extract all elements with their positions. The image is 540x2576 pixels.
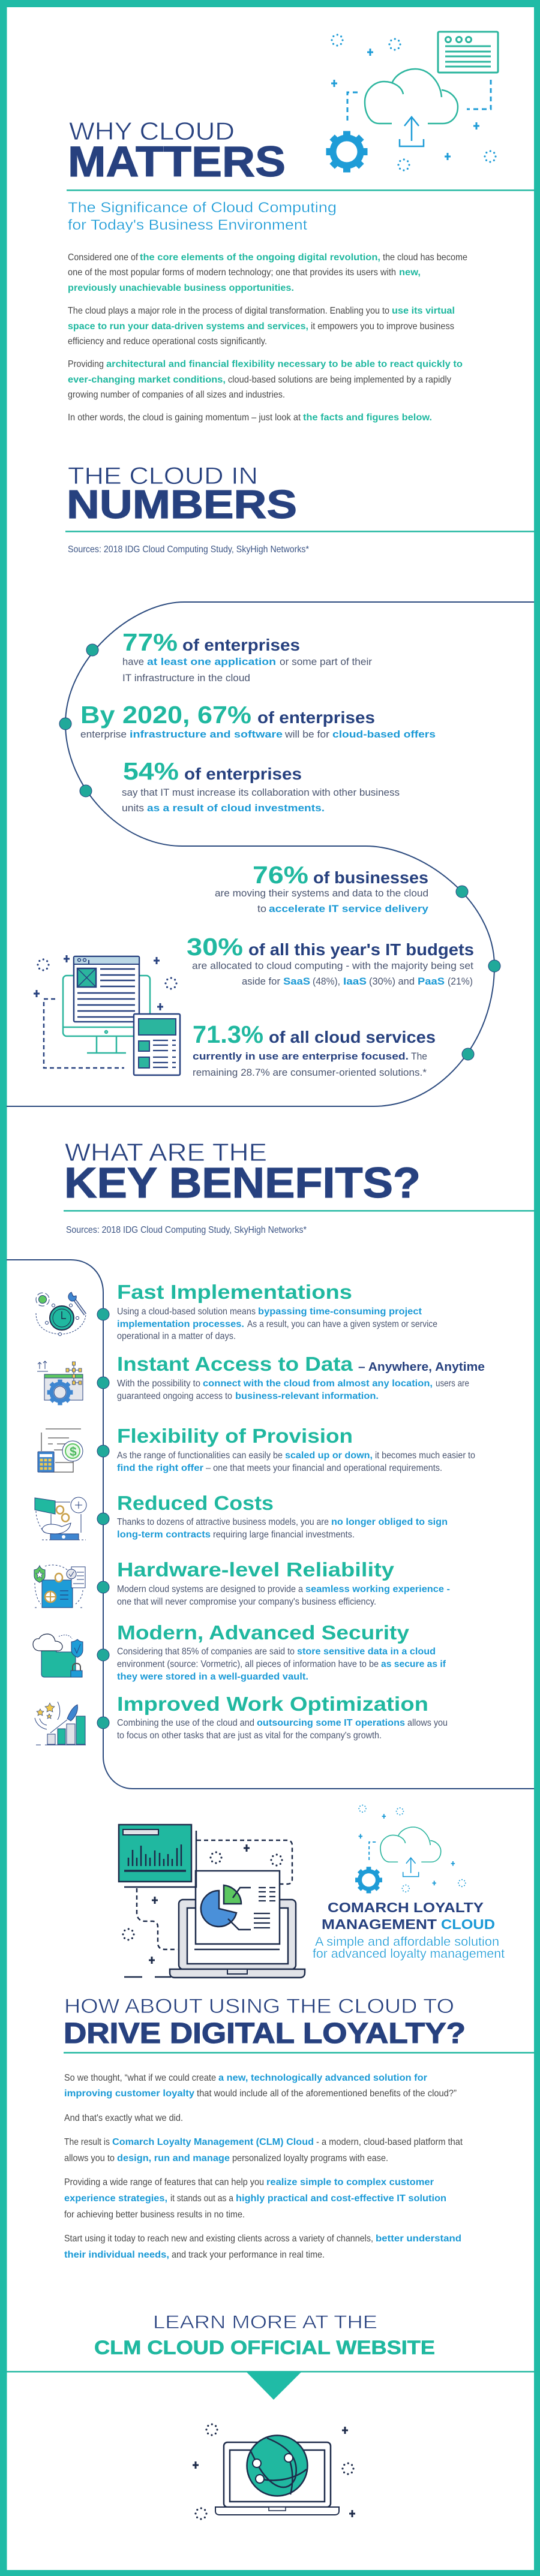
stat: 71.3%: [193, 1021, 436, 1078]
loyalty text: design, run and manage: [117, 2153, 230, 2163]
intro text: growing number of companies of all sizes and industries.: [68, 390, 285, 400]
stat: 30%: (21%): [448, 976, 473, 987]
divider with arrow: [7, 2371, 534, 2400]
icon: laptop report illustration: [119, 1825, 305, 1978]
call to action: CLM CLOUD OFFICIAL WEBSITE: [94, 2337, 435, 2358]
benefit: flexibility of provision: scaled up or down,: [285, 1450, 373, 1461]
loyalty text: Comarch Loyalty Management (CLM) Cloud: [112, 2137, 314, 2147]
benefit: instant access to data: connect with the cloud from almost any location,: [203, 1379, 433, 1389]
benefit: improved work optimization: [117, 1693, 448, 1741]
loyalty text: realize simple to complex customer: [266, 2177, 434, 2187]
benefit: instant access to data: business-relevant information.: [235, 1391, 379, 1401]
benefit: improved work optimization: to focus on other tasks that are just as vital for the company's growth.: [117, 1731, 382, 1741]
stat: 77%: IT infrastructure in the cloud: [122, 672, 250, 684]
intro text: use its virtual: [392, 306, 455, 316]
decorative marks: [193, 2424, 355, 2519]
benefit: modern advanced security: Modern, Advanced Security: [117, 1622, 409, 1644]
loyalty text: Providing a wide range of features that can help you: [64, 2177, 264, 2187]
intro text: one of the most popular forms of modern technology; one that provides its users with: [68, 267, 396, 278]
title: why cloud matters: [68, 117, 286, 186]
icon: safe and shield: [34, 1565, 85, 1608]
loyalty text: highly practical and cost-effective IT solution: [236, 2193, 446, 2204]
decorative marks: [34, 955, 176, 1010]
stat: 30%: SaaS: [283, 976, 310, 987]
stat: 30%: PaaS: [418, 976, 445, 987]
heading: the cloud in numbers: NUMBERS: [67, 482, 297, 527]
benefit: instant access to data: guaranteed ongoing access to: [117, 1391, 232, 1401]
benefit: fast implementations: [117, 1281, 437, 1341]
heading: key benefits: KEY BENEFITS?: [64, 1160, 421, 1207]
benefit: instant access to data: – Anywhere, Anytime: [358, 1361, 485, 1374]
intro text: the cloud has become: [383, 252, 467, 263]
loyalty text: for achieving better business results in no time.: [64, 2210, 245, 2220]
heading: drive digital loyalty: HOW ABOUT USING THE CLOUD TO: [64, 1995, 454, 2018]
benefit: hardware-level reliability: [117, 1559, 450, 1607]
heading: key benefits: WHAT ARE THE: [65, 1138, 267, 1166]
stat: by 2020 67%: will be for: [284, 729, 329, 740]
icon: invoice, calculator and coin: [38, 1429, 83, 1472]
stat: 77%: of enterprises: [182, 636, 300, 654]
stat: 71.3%: of all cloud services: [269, 1028, 436, 1046]
benefit: flexibility of provision: [117, 1425, 475, 1473]
logo: comarch loyalty management cloud: [313, 1805, 505, 1961]
loyalty text: Start using it today to reach new and existing clients across a variety of channels,: [64, 2234, 373, 2244]
benefit: flexibility of provision: it becomes much easier to: [375, 1450, 475, 1461]
loyalty text: that would include all of the aforementioned benefits of the cloud?”: [197, 2089, 457, 2099]
benefit: instant access to data: With the possibility to: [117, 1379, 200, 1389]
call to action: [94, 2311, 435, 2358]
icon: cloud folder and lock: [33, 1634, 83, 1677]
benefit: flexibility of provision: – one that meets your financial and operational requirements.: [206, 1463, 442, 1473]
heading: key benefits: [64, 1138, 421, 1207]
intro text: the core elements of the ongoing digital revolution,: [140, 252, 380, 263]
intro text: Providing: [68, 359, 104, 369]
subtitle: [68, 200, 337, 233]
stat: 71.3%: currently in use are enterprise focused.: [193, 1051, 409, 1062]
dashed connectors: [347, 80, 491, 121]
benefit: modern advanced security: they were stored in a well-guarded vault.: [117, 1672, 308, 1682]
timeline: benefits: [7, 1260, 534, 1789]
stat: by 2020 67%: of enterprises: [257, 708, 375, 727]
benefit: fast implementations: implementation processes.: [117, 1319, 244, 1329]
heading: the cloud in numbers: THE CLOUD IN: [68, 463, 258, 489]
stat: 54%: [122, 757, 400, 814]
window: [74, 956, 139, 1022]
stat: 77%: at least one application: [147, 656, 276, 667]
benefit: hardware-level reliability: Modern cloud systems are designed to provide a: [117, 1584, 303, 1594]
benefit: modern advanced security: environment (source: Vormetric), all pieces of information have to be: [117, 1659, 379, 1669]
stat: 54%: say that IT must increase its collaboration with other business: [122, 787, 400, 798]
icon: monitor, window and tablet: [34, 955, 180, 1075]
icon: cloud hero illustration: [326, 32, 498, 173]
subtitle: for Today's Business Environment: [68, 217, 307, 233]
decorative marks: [123, 1844, 282, 1964]
benefit: reduced costs: Thanks to dozens of attractive business models, you are: [117, 1517, 329, 1527]
benefit: modern advanced security: Considering that 85% of companies are said to: [117, 1647, 295, 1657]
benefit: reduced costs: long-term contracts: [117, 1530, 211, 1540]
benefit: reduced costs: no longer obliged to sign: [331, 1517, 448, 1527]
loyalty text: their individual needs,: [64, 2250, 169, 2260]
benefit: improved work optimization: Combining the use of the cloud and: [117, 1718, 254, 1728]
stat: by 2020 67%: infrastructure and software: [130, 729, 283, 740]
benefit: reduced costs: [117, 1492, 448, 1540]
stat: 30%: of all this year's IT budgets: [248, 940, 474, 959]
tagline: A simple and affordable solution: [315, 1935, 499, 1949]
benefit: fast implementations: As a result, you can have a given system or service: [247, 1319, 437, 1329]
benefit: fast implementations: bypassing time-consuming project: [258, 1307, 422, 1317]
icon: rocket and growth bars: [35, 1702, 86, 1745]
benefit: hardware-level reliability: one that will never compromise your company's business efficiency.: [117, 1597, 376, 1607]
product name: COMARCH LOYALTY: [328, 1900, 484, 1915]
stat: 30%: (48%),: [313, 976, 340, 987]
intro text: Considered one of: [68, 252, 138, 263]
benefit: flexibility of provision: As the range of functionalities can easily be: [117, 1450, 283, 1461]
call to action: LEARN MORE AT THE: [153, 2311, 377, 2333]
stat: 76%: 76%: [253, 861, 308, 889]
intro text: previously unachievable business opportunities.: [68, 283, 294, 293]
loyalty text: [64, 2073, 463, 2260]
laptop: [124, 1900, 305, 1978]
icon: cloud outline: [365, 69, 458, 124]
stat: by 2020 67%: By 2020, 67%: [80, 701, 251, 729]
title: why cloud matters: WHY CLOUD: [69, 117, 235, 145]
benefit: improved work optimization: allows you: [407, 1718, 448, 1728]
icon: invoice, calculator and coin: $: [70, 1445, 77, 1459]
monitor: [63, 976, 150, 1053]
intro text: efficiency and reduce operational costs significantly.: [68, 336, 267, 347]
intro text: space to run your data-driven systems and services,: [68, 321, 308, 332]
loyalty text: improving customer loyalty: [64, 2089, 194, 2099]
benefit: flexibility of provision: find the right offer: [117, 1463, 203, 1473]
loyalty text: and track your performance in real time.: [172, 2250, 325, 2260]
loyalty text: So we thought, “what if we could create: [64, 2073, 216, 2083]
benefit: hardware-level reliability: seamless working experience -: [305, 1584, 450, 1594]
stat: 71.3%: The: [411, 1051, 427, 1062]
icon: wallet and coins: [35, 1497, 86, 1540]
loyalty text: And that's exactly what we did.: [64, 2113, 183, 2123]
arrow: down triangle: [246, 2372, 302, 2400]
benefit: fast implementations: Using a cloud-based solution means: [117, 1307, 256, 1317]
intro text: the facts and figures below.: [303, 413, 432, 423]
logo: comarch loyalty management cloud: MANAGEMENT: [322, 1916, 437, 1932]
tablet: [134, 1014, 180, 1075]
benefit: reduced costs: requiring large financial investments.: [213, 1530, 355, 1540]
icon: gear panel: [37, 1361, 83, 1405]
stat: 77%: [122, 628, 372, 684]
stat: 30%: aside for: [242, 976, 280, 987]
intro text: In other words, the cloud is gaining momentum – just look at: [68, 413, 301, 423]
heading: drive digital loyalty: [64, 1995, 466, 2050]
dashed connector: [44, 999, 124, 1068]
dashed connectors: [137, 1840, 292, 1949]
benefit: instant access to data: [117, 1353, 485, 1401]
loyalty text: experience strategies,: [64, 2193, 167, 2204]
stat: by 2020 67%: cloud-based offers: [332, 729, 436, 740]
logo: comarch loyalty management cloud: CLOUD: [441, 1916, 495, 1932]
benefit: improved work optimization: Improved Work Optimization: [117, 1693, 428, 1716]
stat: 76%: are moving their systems and data to the cloud: [215, 887, 428, 899]
icon: gear: [326, 131, 367, 173]
stat: 30%: (30%) and: [369, 976, 415, 987]
benefit: fast implementations: operational in a matter of days.: [117, 1331, 236, 1341]
stat: 77%: 77%: [122, 628, 178, 656]
stat: 30%: [187, 933, 474, 987]
stat: 71.3%: 71.3%: [193, 1021, 263, 1048]
loyalty text: better understand: [376, 2234, 461, 2244]
benefit: instant access to data: Instant Access to Data: [117, 1353, 353, 1376]
sources note: Sources: 2018 IDG Cloud Computing Study, SkyHigh Networks*: [66, 1225, 307, 1235]
title: why cloud matters: MATTERS: [68, 139, 286, 186]
loyalty text: - a modern, cloud-based platform that: [316, 2137, 463, 2147]
intro text: architectural and financial flexibility necessary to be able to react quickly to: [106, 359, 463, 369]
icon: clock and wrench: [36, 1292, 86, 1336]
stat: 54%: 54%: [123, 757, 179, 785]
stat: 76%: of businesses: [313, 868, 428, 887]
benefit: improved work optimization: outsourcing some IT operations: [257, 1718, 405, 1728]
stat: 76%: accelerate IT service delivery: [269, 903, 429, 914]
benefit: fast implementations: Fast Implementations: [117, 1281, 352, 1304]
laptop: [215, 2442, 339, 2515]
benefit: modern advanced security: store sensitive data in a cloud: [297, 1647, 436, 1657]
stat: 54%: as a result of cloud investments.: [147, 802, 325, 814]
intro text: [68, 252, 467, 423]
intro text: new,: [399, 267, 421, 278]
benefit: flexibility of provision: Flexibility of Provision: [117, 1425, 353, 1448]
heading: the cloud in numbers: [67, 463, 297, 527]
icon: browser window: [438, 32, 498, 73]
stat: 77%: or some part of their: [280, 656, 372, 667]
timeline curve: numbers: [7, 602, 534, 1106]
benefit: reduced costs: Reduced Costs: [117, 1492, 274, 1515]
icon: small cloud: [355, 1805, 466, 1893]
intro text: The cloud plays a major role in the process of digital transformation. Enabling you to: [68, 306, 389, 316]
icon: laptop with globe: [193, 2424, 355, 2519]
stat: by 2020 67%: enterprise: [80, 729, 127, 740]
logo: comarch loyalty management cloud: for advanced loyalty management: [313, 1947, 505, 1961]
stat: 30%: IaaS: [343, 976, 367, 987]
intro text: ever-changing market conditions,: [68, 375, 226, 385]
stat: 30%: 30%: [187, 933, 243, 961]
loyalty text: it stands out as a: [170, 2193, 233, 2204]
stat: 76%: to: [257, 903, 266, 914]
loyalty text: a new, technologically advanced solution for: [218, 2073, 427, 2083]
loyalty text: allows you to: [64, 2153, 115, 2163]
decorative dots and plus marks: [331, 35, 496, 170]
benefit: modern advanced security: as secure as if: [381, 1659, 446, 1669]
benefit: modern advanced security: [117, 1622, 446, 1682]
teal chart panel: [119, 1825, 196, 1887]
stat: 54%: of enterprises: [184, 765, 302, 783]
stat: 77%: have: [122, 656, 144, 667]
globe: [247, 2436, 307, 2496]
loyalty text: personalized loyalty programs with ease.: [232, 2153, 388, 2163]
document with pie chart: [194, 1871, 280, 1949]
stat: 76%: [215, 861, 429, 914]
stat: 30%: are allocated to cloud computing - with the majority being set: [192, 960, 473, 971]
heading: drive digital loyalty: DRIVE DIGITAL LOYALTY?: [64, 2018, 466, 2050]
icon: upload arrow: [400, 117, 424, 146]
benefit: instant access to data: users are: [436, 1379, 469, 1389]
loyalty text: The result is: [64, 2137, 110, 2147]
benefit: hardware-level reliability: Hardware-level Reliability: [117, 1559, 394, 1581]
stat: by 2020 67%: [80, 701, 436, 740]
stat: 54%: units: [122, 802, 144, 814]
sources note: Sources: 2018 IDG Cloud Computing Study, SkyHigh Networks*: [68, 544, 309, 555]
intro text: cloud-based solutions are being implemented by a rapidly: [228, 375, 451, 385]
subtitle: The Significance of Cloud Computing: [68, 200, 337, 216]
intro text: it empowers you to improve business: [311, 321, 454, 332]
stat: 71.3%: remaining 28.7% are consumer-oriented solutions.*: [193, 1067, 427, 1078]
